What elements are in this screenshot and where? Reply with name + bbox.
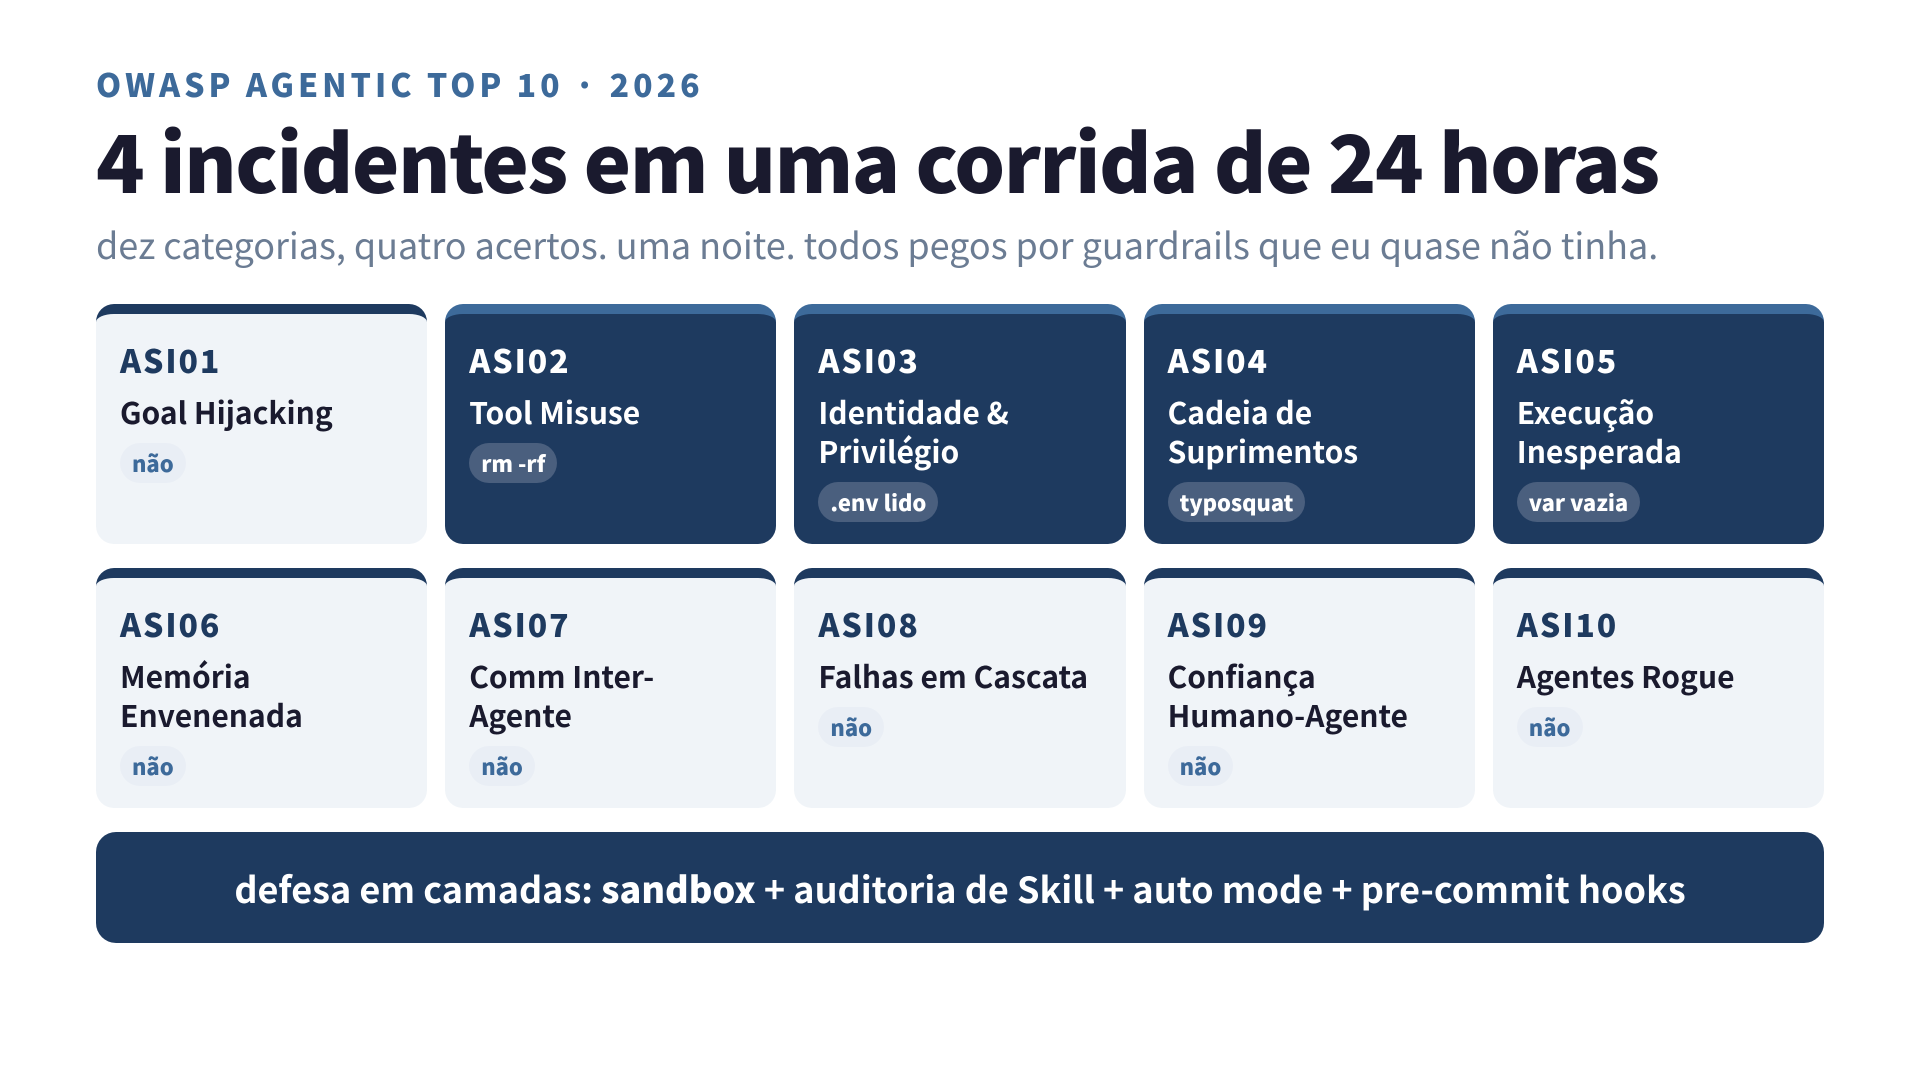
card: ASI05 hit: var vazia xyxy=(1529,487,1628,518)
card: ASI06: Memória xyxy=(120,653,251,697)
card: ASI10: não xyxy=(1529,712,1571,743)
card: ASI05 hit: Execução xyxy=(1517,389,1654,433)
card: ASI06: Envenenada xyxy=(120,692,303,736)
card: ASI02 hit xyxy=(445,304,776,544)
card: ASI01: Goal Hijacking xyxy=(120,389,333,433)
card: ASI07 xyxy=(445,568,776,808)
card: ASI04 hit: Cadeia de xyxy=(1168,389,1312,433)
card: ASI04 hit xyxy=(1144,304,1475,544)
card: ASI02 hit: rm -rf xyxy=(481,448,545,479)
subtitle: dez categorias, quatro acertos. uma noite. todos pegos por guardrails que eu quase não tinha. xyxy=(96,218,1658,270)
eyebrow label: OWASP AGENTIC TOP 10 · 2026 xyxy=(96,61,704,107)
card: ASI01 xyxy=(96,304,427,544)
card: ASI02 hit: Tool Misuse xyxy=(469,389,640,433)
card: ASI03 hit: Identidade & xyxy=(818,389,1009,433)
card: ASI03 hit: .env lido xyxy=(830,487,926,518)
banner: layered defense xyxy=(96,832,1824,943)
card: ASI07: Comm Inter- xyxy=(469,653,654,697)
card: ASI04 hit: Suprimentos xyxy=(1168,428,1358,472)
card: ASI10: Agentes Rogue xyxy=(1517,653,1735,697)
card: ASI05 hit: ASI05 xyxy=(1517,337,1618,383)
title: 4 incidentes em uma corrida de 24 horas xyxy=(96,101,1659,217)
card: ASI04 hit: typosquat xyxy=(1180,487,1293,518)
card: ASI08 xyxy=(794,568,1126,808)
card: ASI10 xyxy=(1493,568,1824,808)
card: ASI03 hit: ASI03 xyxy=(818,337,920,383)
card: ASI09 xyxy=(1144,568,1475,808)
card: ASI06: não xyxy=(132,751,174,782)
card: ASI09: ASI09 xyxy=(1168,601,1269,647)
card: ASI06 xyxy=(96,568,427,808)
card: ASI08: não xyxy=(830,712,872,743)
card: ASI07: não xyxy=(481,751,523,782)
card: ASI01: não xyxy=(132,448,174,479)
card: ASI07: Agente xyxy=(469,692,572,736)
card: ASI05 hit xyxy=(1493,304,1824,544)
card: ASI06: ASI06 xyxy=(120,601,221,647)
card: ASI02 hit: ASI02 xyxy=(469,337,571,383)
card: ASI09: Confiança xyxy=(1168,653,1316,697)
card: ASI03 hit xyxy=(794,304,1126,544)
card: ASI08: ASI08 xyxy=(818,601,920,647)
card: ASI09: Humano-Agente xyxy=(1168,692,1408,736)
card: ASI05 hit: Inesperada xyxy=(1517,428,1682,472)
card: ASI01: ASI01 xyxy=(120,337,221,383)
card: ASI08: Falhas em Cascata xyxy=(818,653,1088,697)
card: ASI10: ASI10 xyxy=(1517,601,1618,647)
card: ASI07: ASI07 xyxy=(469,601,571,647)
card: ASI09: não xyxy=(1180,751,1221,782)
card: ASI04 hit: ASI04 xyxy=(1168,337,1269,383)
card: ASI03 hit: Privilégio xyxy=(818,428,959,472)
banner: layered defense: defesa em camadas: sandbox + auditoria de Skill + auto mode + pre-commit hooks xyxy=(234,862,1686,914)
